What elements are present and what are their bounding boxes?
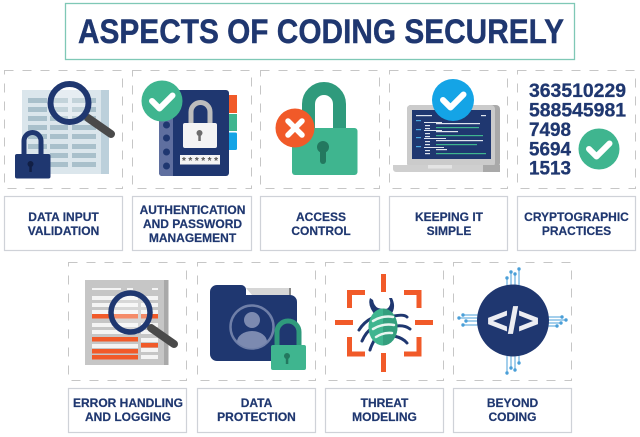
label: data input validation xyxy=(4,196,122,250)
label: keeping it simple xyxy=(390,196,508,250)
label: error handling: ERROR HANDLING xyxy=(73,396,183,410)
panel: access control xyxy=(260,70,380,188)
label: access control: CONTROL xyxy=(291,224,351,238)
label: data input validation: DATA INPUT xyxy=(28,210,99,224)
label: data protection xyxy=(198,388,316,432)
label: cryptographic practices: PRACTICES xyxy=(542,224,611,238)
panel: threat modeling xyxy=(326,262,444,380)
title xyxy=(66,4,574,60)
icon: laptop with blue check xyxy=(393,79,500,172)
panel: keeping it simple xyxy=(390,70,508,188)
icon: log document with magnifier xyxy=(85,280,174,365)
label: data protection: PROTECTION xyxy=(217,410,296,424)
icon: folder with user and lock xyxy=(210,285,306,370)
label: beyond coding: CODING xyxy=(488,410,536,424)
label: cryptographic practices: CRYPTOGRAPHIC xyxy=(524,210,629,224)
label: data protection: DATA xyxy=(241,396,273,410)
label: data input validation: VALIDATION xyxy=(28,224,99,238)
icon: numbers with green check: 5694 xyxy=(529,140,571,160)
icon: bug in target xyxy=(335,274,433,372)
icon: numbers with green check: 1513 xyxy=(529,158,571,180)
icon: numbers with green check xyxy=(529,81,626,180)
panel: beyond coding xyxy=(454,262,572,380)
icon: numbers with green check: 7498 xyxy=(529,120,571,141)
icon: numbers with green check: 588545981 xyxy=(529,100,626,122)
label: authentication: AND PASSWORD xyxy=(143,217,242,231)
label: access control xyxy=(260,196,380,250)
label: error handling xyxy=(68,388,186,432)
icon: green padlock with cross xyxy=(276,88,358,175)
label: beyond coding: BEYOND xyxy=(487,396,539,410)
label: error handling: AND LOGGING xyxy=(85,410,171,424)
label: authentication: MANAGEMENT xyxy=(149,231,237,245)
title: ASPECTS OF CODING SECURELY xyxy=(78,13,564,51)
label: keeping it simple: SIMPLE xyxy=(427,224,471,238)
label: threat modeling: MODELING xyxy=(352,410,417,424)
panel: data input validation xyxy=(4,70,122,188)
label: authentication xyxy=(132,196,252,250)
label: access control: ACCESS xyxy=(296,210,346,224)
panel: error handling xyxy=(68,262,186,380)
icon: code circle with circuit lines: </> xyxy=(487,300,539,341)
panel: data protection xyxy=(198,262,316,380)
label: keeping it simple: KEEPING IT xyxy=(415,210,484,224)
icon: numbers with green check: 363510229 xyxy=(529,81,626,102)
label: authentication: AUTHENTICATION xyxy=(140,203,245,217)
label: threat modeling: THREAT xyxy=(361,396,409,410)
panel: cryptographic practices xyxy=(518,70,636,188)
icon: address book with lock: ****** xyxy=(182,156,218,167)
label: beyond coding xyxy=(454,388,572,432)
icon: spreadsheet with magnifier and lock xyxy=(15,84,111,178)
label: threat modeling xyxy=(326,388,444,432)
panel: authentication xyxy=(132,70,252,188)
label: cryptographic practices xyxy=(518,196,636,250)
